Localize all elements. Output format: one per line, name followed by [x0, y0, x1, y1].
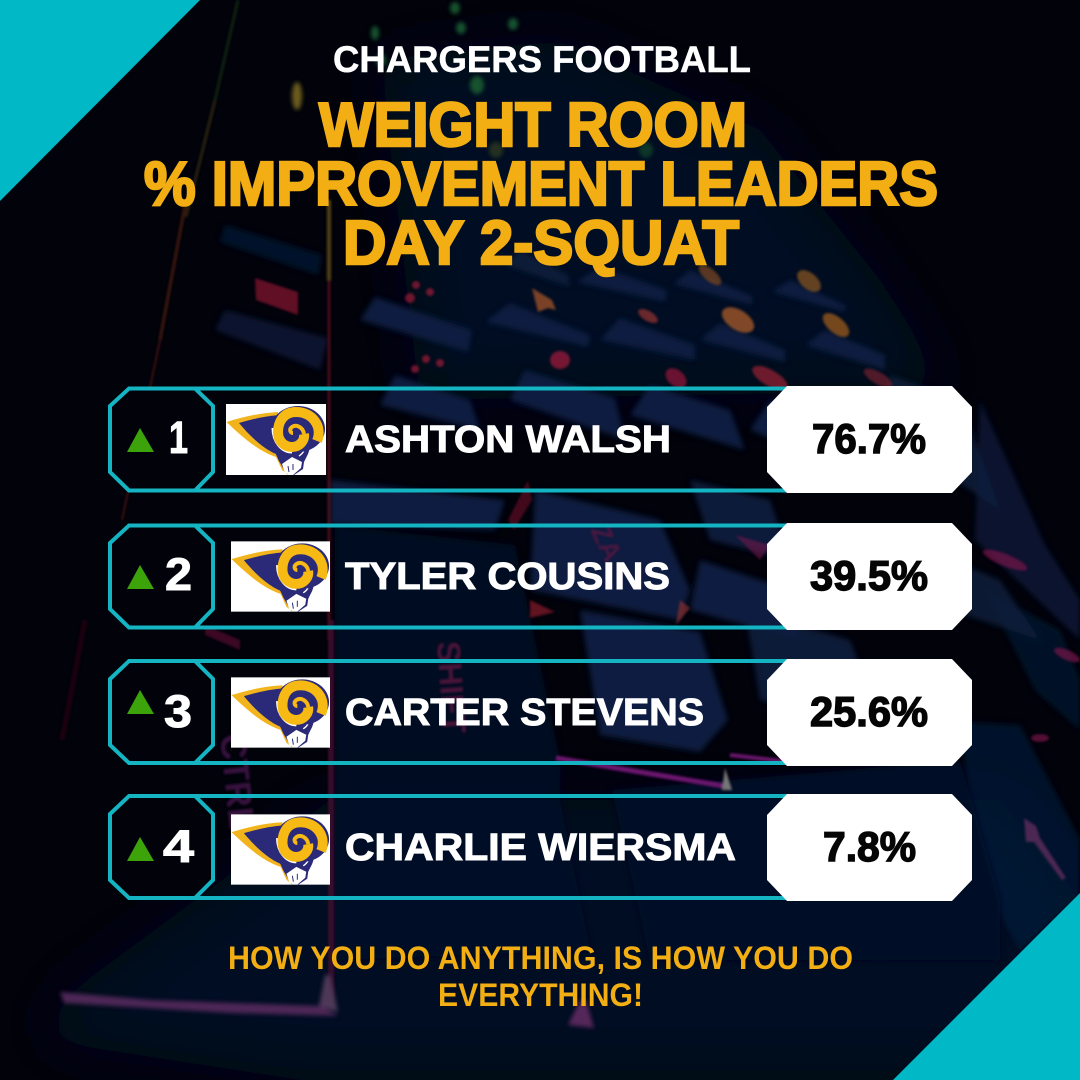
background: key legend SHIFT: SHIFT: [430, 640, 472, 735]
player name: TYLER COUSINS: [345, 556, 670, 598]
row frame: [195, 796, 970, 898]
leaderboard row 3: Carter Stevens: [110, 659, 972, 766]
heading: weight room leaders: DAY 2-SQUAT: [343, 209, 739, 278]
player name: CARTER STEVENS: [345, 692, 704, 734]
value panel: [767, 794, 972, 901]
value: 76.7%: [812, 415, 926, 462]
leaderboard row 2: Tyler Cousins: [110, 523, 972, 630]
title: Chargers Football: CHARGERS FOOTBALL: [333, 39, 751, 80]
up arrow: [127, 428, 154, 452]
player name: CHARLIE WIERSMA: [345, 827, 736, 869]
background glow: red and magenta lines: [62, 0, 790, 1000]
value panel: [767, 523, 972, 630]
footer motto: HOW YOU DO ANYTHING, IS HOW YOU DO: [228, 940, 853, 976]
value panel: [767, 659, 972, 766]
up arrow: [127, 690, 154, 714]
background: key legend CTRL: CTRL: [212, 732, 263, 831]
team logo: [231, 677, 330, 748]
corner triangle bottom-right: [893, 893, 1080, 1080]
leaderboard row 4: Charlie Wiersma: [110, 794, 972, 901]
value: 7.8%: [823, 823, 916, 870]
corner triangle top-left: [0, 0, 200, 201]
rank octagon: [110, 661, 213, 763]
value: 39.5%: [810, 552, 928, 599]
heading: weight room leaders: WEIGHT ROOM: [319, 91, 747, 160]
background: key legend A: ZA: [585, 519, 628, 566]
background glow: green key dots: [292, 2, 653, 158]
background: keycap shapes: [215, 225, 1080, 950]
heading: weight room leaders: % IMPROVEMENT LEADERS: [144, 150, 938, 219]
background glow: magenta bar: [60, 975, 594, 1028]
rank number: 2: [165, 549, 192, 600]
up arrow: [127, 837, 154, 861]
leaderboard row 1: Ashton Walsh: [110, 386, 972, 493]
heading: weight room leaders: [144, 91, 938, 278]
row frame: [195, 388, 970, 490]
value: 25.6%: [810, 688, 928, 735]
footer motto: EVERYTHING!: [438, 977, 643, 1013]
rank number: 4: [163, 821, 194, 872]
row frame: [195, 526, 970, 628]
background: dim upper keyboard area: [380, 40, 950, 400]
background glow: red and orange key legends: [205, 261, 1080, 880]
team logo: [226, 404, 326, 475]
rank octagon: [110, 526, 213, 628]
rank number: 1: [169, 412, 188, 463]
team logo: [231, 814, 330, 885]
value panel: [767, 386, 972, 493]
rank octagon: [110, 388, 213, 490]
player name: ASHTON WALSH: [345, 419, 671, 461]
team logo: [231, 541, 330, 612]
rank number: 3: [164, 686, 192, 737]
row frame: [195, 661, 970, 763]
background: navy lower keyboard area: [40, 800, 1080, 1080]
rank octagon: [110, 796, 213, 898]
up arrow: [127, 565, 154, 589]
footer motto: [228, 940, 853, 1013]
